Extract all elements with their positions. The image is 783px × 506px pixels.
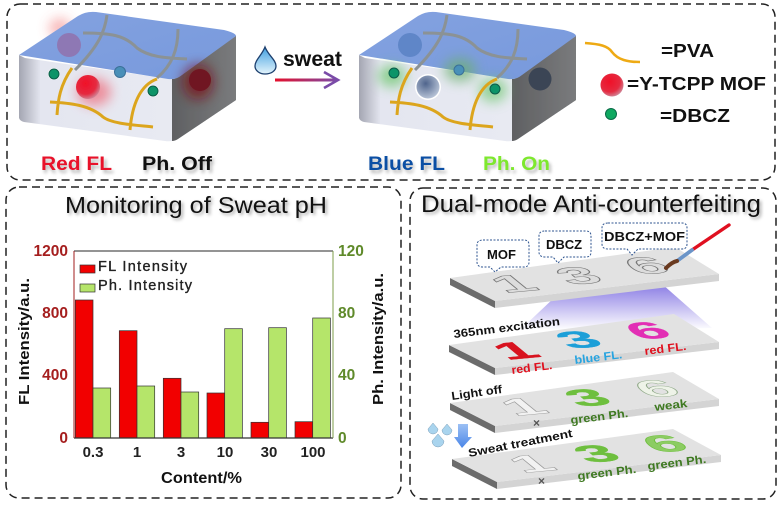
slab: light off: weak [653, 398, 689, 414]
slab: 365nm excitation: 3 [545, 326, 612, 354]
bar chart: 30 [261, 444, 277, 461]
label: sweat: sweat [283, 48, 342, 71]
slab: sweat treatment: green Ph. [647, 454, 707, 473]
bar chart: 100 [300, 444, 326, 461]
icon: paint brush [666, 225, 729, 268]
bar chart: 80 [338, 305, 355, 322]
bar chart: FL Intensity/a.u. [16, 278, 33, 405]
bar chart: 1 [133, 444, 141, 461]
slab: light off: 1 [490, 393, 557, 421]
panel: sweat response schematic [7, 4, 775, 180]
heading: Monitoring of Sweat pH: Monitoring of Sweat pH [65, 192, 327, 218]
legend: PVA [585, 41, 714, 62]
legend: Y-TCPP MOF [600, 74, 766, 96]
slab: sweat treatment [452, 428, 721, 489]
callout: DBCZ [539, 231, 591, 263]
callout: DBCZ+MOF: DBCZ+MOF [604, 229, 685, 244]
legend: Y-TCPP MOF: =Y-TCPP MOF [627, 74, 766, 94]
block: after sweat [359, 12, 576, 141]
slab: sweat treatment: 1 [498, 450, 565, 478]
slab: 365nm excitation: red FL. [644, 341, 687, 358]
arrow: sweat transition [275, 72, 338, 88]
slab: 365nm excitation: 1 [482, 337, 549, 365]
bar chart: Content/% [161, 470, 242, 487]
slab: sweat treatment: 3 [563, 440, 630, 468]
label: Ph. On: Ph. On [483, 154, 550, 175]
callout: MOF: MOF [487, 247, 516, 262]
slab: sweat treatment: 6 [631, 430, 698, 458]
callout: DBCZ+MOF [602, 223, 687, 255]
panel: monitoring of sweat pH [6, 187, 401, 498]
slab: sweat treatment: × [538, 474, 545, 488]
slab: 365nm excitation: blue FL. [574, 349, 623, 367]
bar chart [16, 243, 387, 487]
slab: light off: 6 [623, 375, 690, 403]
slab: 365nm excitation: 6 [614, 317, 681, 345]
legend: PVA: =PVA [661, 41, 714, 61]
bar chart: 40 [338, 367, 355, 384]
legend: DBCZ [606, 106, 730, 126]
slab: 365nm excitation [449, 314, 719, 377]
bar chart: 120 [338, 243, 364, 260]
callout: MOF [477, 240, 529, 272]
bar chart: 10 [217, 444, 233, 461]
slab: 365nm excitation: red FL. [511, 360, 553, 377]
slab: printed pattern: 1 [480, 270, 547, 298]
bar chart: 0 [338, 430, 347, 447]
slab: printed pattern: 3 [545, 262, 612, 290]
label: Ph. Off: Ph. Off [144, 157, 215, 178]
callout: DBCZ: DBCZ [546, 237, 582, 252]
block: before sweat [19, 12, 236, 141]
bar chart: 800 [42, 305, 68, 322]
bar chart: Ph. Intensity/a.u. [370, 273, 387, 405]
panel: dual-mode anti-counterfeiting [410, 188, 776, 499]
slab: printed pattern [450, 247, 719, 308]
chart legend [80, 259, 193, 294]
slab: light off: × [533, 416, 540, 430]
icon: sweat drop [255, 47, 276, 74]
chart legend: Ph. Intensity [98, 278, 193, 294]
heading: Monitoring of Sweat pH: Monitoring of Sweat pH [67, 194, 329, 220]
slab: printed pattern: 6 [613, 252, 680, 280]
label: Ph. Off: Ph. Off [142, 154, 213, 175]
slab: light off: 3 [554, 384, 621, 412]
label: Blue FL: Blue FL [370, 157, 447, 178]
slab: sweat treatment: green Ph. [577, 464, 637, 483]
label: Ph. On: Ph. On [485, 157, 552, 178]
slab: light off: green Ph. [570, 408, 629, 427]
bar chart: 0 [59, 430, 68, 447]
slab: 365nm excitation: 365nm excitation [453, 316, 561, 341]
bar chart: 3 [177, 444, 185, 461]
slab: light off [450, 372, 719, 433]
label: Blue FL: Blue FL [368, 154, 445, 175]
bar chart: 0.3 [83, 444, 103, 461]
bar chart: 1200 [34, 243, 68, 260]
icon: sweat drops [428, 423, 452, 447]
chart legend: FL Intensity [98, 259, 188, 275]
heading: Dual-mode Anti-counterfeiting: Dual-mode Anti-counterfeiting [421, 191, 761, 218]
bar chart: 400 [42, 367, 68, 384]
label: Red FL: Red FL [43, 157, 114, 178]
slab: light off: Light off [451, 384, 503, 403]
heading: Dual-mode Anti-counterfeiting: Dual-mode Anti-counterfeiting [423, 193, 763, 220]
arrow: sweat treatment [454, 424, 472, 448]
legend: DBCZ: =DBCZ [660, 106, 730, 126]
slab: sweat treatment: Sweat treatment [467, 428, 574, 460]
label: Red FL: Red FL [41, 154, 112, 175]
excitation light beam [520, 284, 712, 330]
